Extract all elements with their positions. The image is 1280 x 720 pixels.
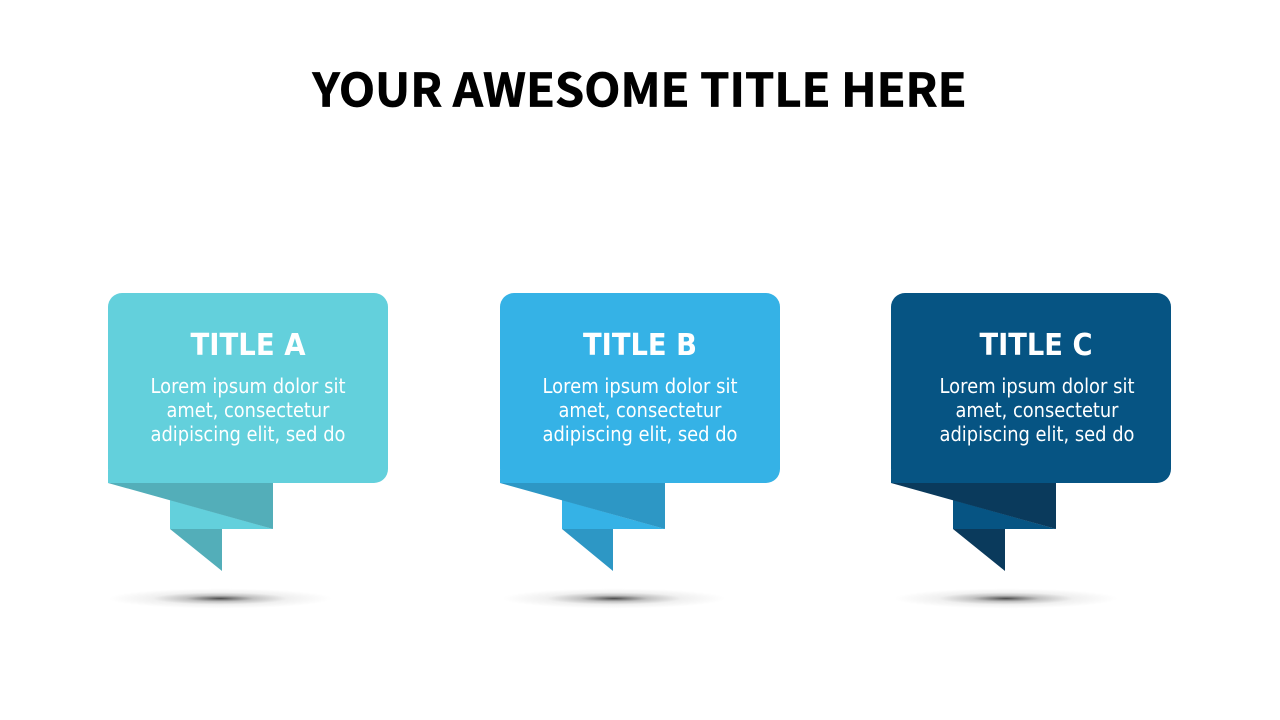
body text C: adipiscing elit, sed do [940,422,1134,446]
heading A: TITLE A [190,328,306,363]
body text B: Lorem ipsum dolor sit [542,374,738,398]
heading B: TITLE B [583,328,697,363]
shadow B [502,588,726,608]
panel: title B callout [500,293,780,608]
shadow C [894,588,1118,608]
box A [108,293,388,483]
body text C [940,374,1135,446]
body text C: amet, consectetur [956,398,1119,422]
ribbon fold C [891,483,1056,571]
body text B: amet, consectetur [558,398,722,422]
box B [500,293,780,483]
body text A [150,374,346,446]
panel: title C callout [891,293,1171,608]
body text B [542,374,738,446]
heading C: TITLE C [980,328,1092,363]
box C [891,293,1171,483]
panel: title A callout [108,293,388,608]
ribbon fold B [500,483,665,571]
body text A: Lorem ipsum dolor sit [150,374,346,398]
body text A: amet, consectetur [166,398,330,422]
title: YOUR AWESOME TITLE HERE [311,54,967,120]
body text B: adipiscing elit, sed do [542,422,738,446]
body text A: adipiscing elit, sed do [150,422,346,446]
ribbon fold A [108,483,273,571]
body text C: Lorem ipsum dolor sit [940,374,1135,398]
shadow A [108,588,332,608]
